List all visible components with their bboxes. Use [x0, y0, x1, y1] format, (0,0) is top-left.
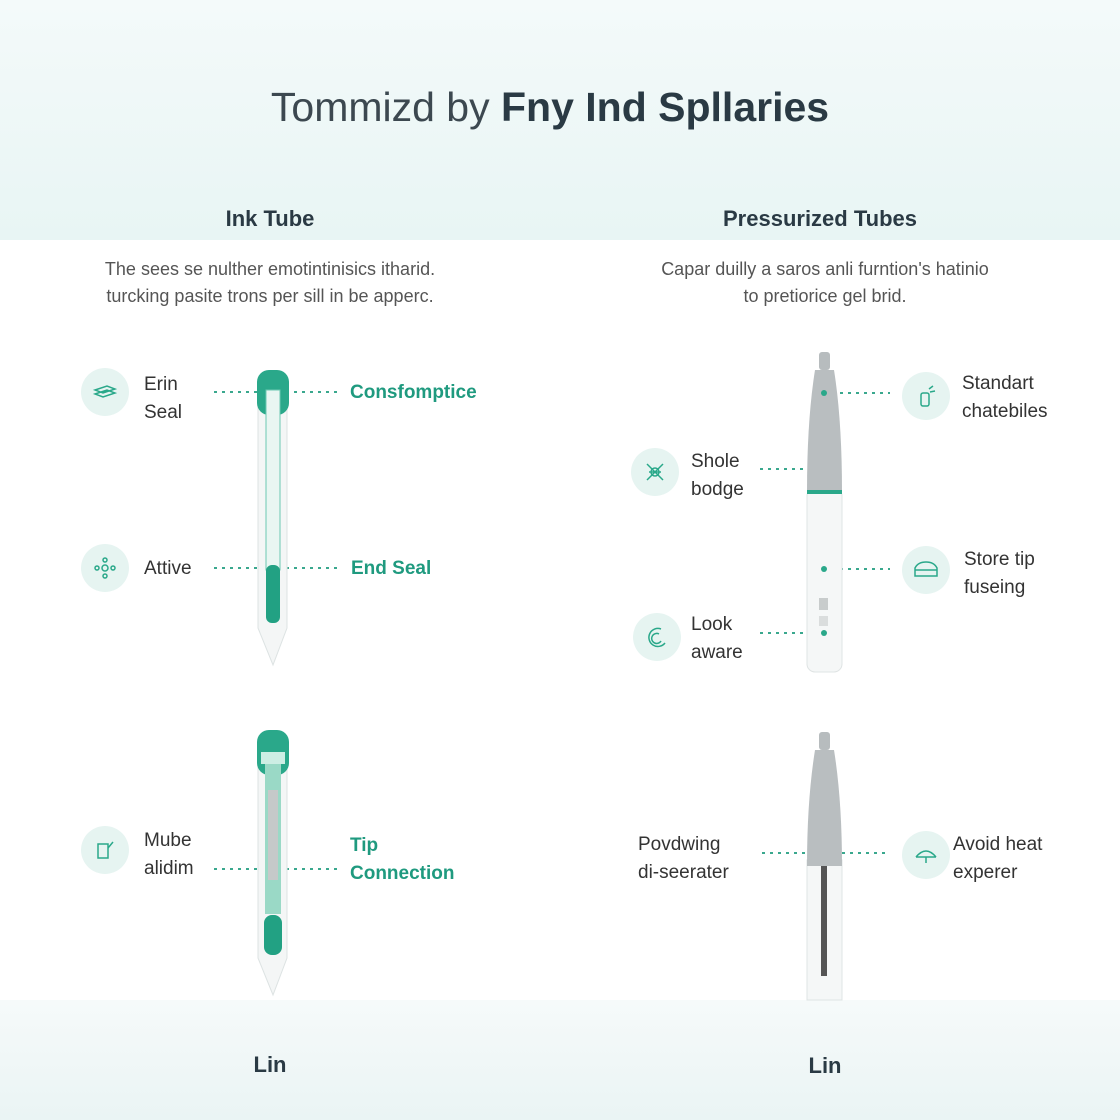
icon: attive	[81, 544, 129, 592]
label: erin seal: Seal	[144, 402, 182, 423]
label: avoid heat	[953, 834, 1042, 883]
icon: shole	[631, 448, 679, 496]
label: tip connection: Tip	[350, 835, 378, 856]
background header band	[0, 0, 1120, 240]
heading: pressurized tubes: Pressurized Tubes	[723, 206, 917, 231]
text: right description: to pretiorice gel brid.	[743, 286, 907, 306]
footer label left: Lin	[254, 1052, 286, 1077]
label: erin seal	[144, 374, 182, 423]
icon: standart	[902, 372, 950, 420]
heading: ink tube: Ink Tube	[226, 206, 314, 231]
text: left description: The sees se nulther emotintinisics itharid.	[105, 259, 435, 279]
label: standart	[962, 373, 1048, 422]
text: right description: Capar duilly a saros anli furntion's hatinio	[661, 259, 989, 279]
label: store tip	[964, 549, 1035, 598]
footer label right: Lin	[808, 1053, 842, 1078]
icon: mube	[81, 826, 129, 874]
label: consfomptice: Consfomptice	[350, 382, 477, 403]
label: povdwing	[638, 834, 729, 883]
label: avoid heat: Avoid heat	[953, 834, 1042, 855]
label: end seal: End Seal	[351, 558, 431, 579]
label: tip connection: Connection	[350, 863, 454, 884]
text: right description	[661, 259, 989, 306]
icon: store tip	[902, 546, 950, 594]
label: povdwing: Povdwing	[638, 834, 720, 855]
label: look aware	[691, 614, 743, 663]
icon: avoid heat	[902, 831, 950, 879]
label: shole bodge: Shole	[691, 451, 740, 472]
pen: pressurized 2	[807, 732, 842, 1000]
text: left description: turcking pasite trons per sill in be apperc.	[106, 286, 434, 306]
label: look aware: Look	[691, 614, 732, 635]
label: store tip: Store tip	[964, 549, 1035, 570]
label: store tip: fuseing	[964, 577, 1025, 598]
pen: ink tube 1	[257, 370, 289, 665]
label: mube alidim: Mube	[144, 830, 192, 851]
label: erin seal: Erin	[144, 374, 178, 395]
label: mube alidim: alidim	[144, 858, 194, 879]
label: standart: chatebiles	[962, 401, 1048, 422]
pen: ink tube 2	[257, 730, 289, 995]
label: povdwing: di-seerater	[638, 862, 729, 883]
background footer band	[0, 1000, 1120, 1120]
icon: look	[633, 613, 681, 661]
label: shole bodge	[691, 451, 744, 500]
label: attive: Attive	[144, 558, 192, 579]
label: tip connection	[350, 835, 454, 884]
icon: erin seal	[81, 368, 129, 416]
text: left description	[105, 259, 435, 306]
title: Tommizd by Fny Ind Spllaries	[271, 84, 829, 130]
label: standart: Standart	[962, 373, 1034, 394]
pen: pressurized 1	[807, 352, 842, 672]
label: avoid heat: experer	[953, 862, 1017, 883]
label: look aware: aware	[691, 642, 743, 663]
label: mube alidim	[144, 830, 194, 879]
label: shole bodge: bodge	[691, 479, 744, 500]
